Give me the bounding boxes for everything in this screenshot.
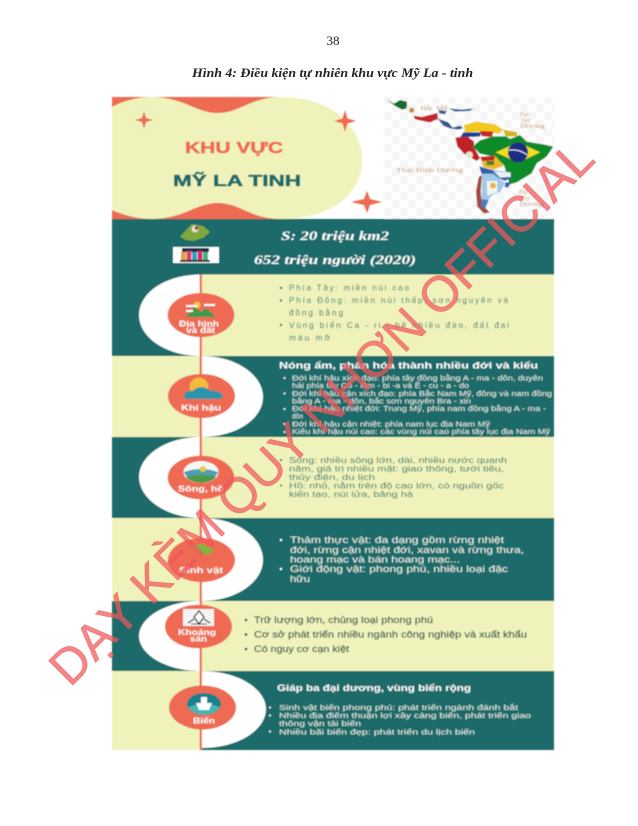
map of Latin America: Đại bbox=[519, 190, 528, 196]
header blob panel: MỸ LA TINH bbox=[173, 172, 301, 190]
panel: terrain and soil: Vùng biển Ca - ri - bê nhiều đảo, đất đai bbox=[289, 320, 509, 330]
map of Latin America: Thái Bình Dương bbox=[396, 168, 463, 174]
panel: living things: Thảm thực vật: đa dạng gồm rừng nhiệt bbox=[290, 535, 505, 545]
center timeline line bbox=[200, 274, 202, 750]
panel: sea: Sinh vật biển phong phú: phát triển ngành đánh bắt bbox=[279, 703, 519, 712]
panel: rivers and lakes bbox=[112, 437, 554, 518]
badge: terrain: và đất bbox=[186, 326, 216, 335]
panel: climate: Kiểu khí hậu núi cao: các vùng núi cao phía tây lục địa Nam Mỹ bbox=[292, 427, 551, 436]
panel: living things: hoang mạc và bán hoang mạc... bbox=[290, 554, 460, 564]
panel: minerals bbox=[112, 601, 554, 671]
badge: rivers: Sông, hồ bbox=[178, 484, 224, 494]
panel: terrain and soil bbox=[112, 274, 554, 356]
badge: climate: Khí hậu bbox=[181, 404, 221, 412]
panel: climate: bằng A - ma - dôn, bắc sơn nguyên Bra - xin bbox=[292, 396, 471, 406]
icon: area map bbox=[180, 224, 210, 241]
panel: living things: đới, rừng cận nhiệt đới, xavan và rừng thưa, bbox=[290, 545, 524, 555]
badge: living things: Sinh vật bbox=[179, 566, 224, 575]
stats band bbox=[112, 219, 554, 274]
panel: minerals: Trữ lượng lớn, chủng loại phong phú bbox=[254, 615, 433, 625]
badge: rivers bbox=[168, 456, 234, 499]
badge: minerals: sản bbox=[190, 634, 207, 644]
panel: terrain and soil: màu mỡ bbox=[289, 334, 331, 342]
icon: population bbox=[173, 247, 219, 263]
stats band: S: 20 triệu km2 bbox=[281, 228, 390, 243]
panel: climate: Đới khí hậu cận nhiệt: phía nam lục địa Nam Mỹ bbox=[292, 420, 491, 428]
panel: sea: Giáp ba đại dương, vùng biển rộng bbox=[277, 683, 471, 693]
panel: rivers and lakes: kiến tạo, núi lửa, băng hà bbox=[289, 489, 413, 499]
badge: minerals bbox=[165, 605, 232, 648]
panel: climate: Nóng ẩm, phân hóa thành nhiều đới và kiểu bbox=[279, 360, 538, 372]
badge: terrain bbox=[168, 293, 234, 337]
panel: sea bbox=[112, 671, 554, 750]
badge: terrain: Địa hình bbox=[179, 320, 219, 328]
panel: rivers and lakes: Hồ: nhỏ, nằm trên độ cao lớn, có nguồn gốc bbox=[289, 480, 505, 490]
panel: terrain and soil: Phía Tây: miền núi cao bbox=[289, 284, 409, 292]
panel: climate bbox=[112, 356, 554, 437]
panel: sea: Nhiều địa điểm thuận lợi xây cảng biển, phát triển giao bbox=[279, 711, 531, 720]
watermark: DẠY KÈM QUY NHƠN OFFICIAL bbox=[38, 129, 605, 696]
panel: sea: thông vận tải biển bbox=[279, 719, 361, 728]
panel: climate: Đới khí hậu xích đạo: phía tây đồng bằng A - ma - dôn, duyên bbox=[292, 374, 543, 382]
panel: terrain and soil: đồng bằng bbox=[289, 308, 343, 318]
page number: 38 bbox=[326, 33, 340, 48]
badge: sea: Biển bbox=[193, 716, 215, 726]
stats band: 652 triệu người (2020) bbox=[254, 252, 416, 267]
panel: minerals: Cơ sở phát triển nhiều ngành công nghiệp và xuất khẩu bbox=[254, 630, 527, 640]
panel: climate: Đới khí hậu cận xích đạo: phía Bắc Nam Mỹ, đông và nam đồng bbox=[292, 389, 552, 398]
badge: minerals: Khoáng bbox=[178, 628, 216, 637]
map of Latin America bbox=[384, 97, 554, 219]
map of Latin America: Bắc Mỹ bbox=[420, 105, 448, 112]
panel: living things: hữu bbox=[290, 574, 310, 584]
badge: living things bbox=[168, 538, 235, 582]
panel: sea: Nhiều bãi biển đẹp: phát triển du lịch biển bbox=[279, 728, 475, 736]
panel: climate: dôn bbox=[292, 412, 303, 420]
map of Latin America: Dương bbox=[519, 202, 544, 208]
header blob panel bbox=[112, 97, 382, 219]
panel: climate: hải phía tây Cô - lôm - bi -a và Ê - cu - a - do bbox=[292, 381, 469, 390]
map of Latin America: Dương bbox=[520, 124, 545, 130]
badge: sea bbox=[169, 686, 236, 730]
panel: living things: Giới động vật: phong phú, nhiều loại đặc bbox=[290, 564, 509, 574]
infographic bbox=[112, 97, 554, 750]
map of Latin America: Tây bbox=[520, 196, 529, 202]
figure caption: Hình 4: Điều kiện tự nhiên khu vực Mỹ La - tinh bbox=[191, 66, 473, 80]
header blob panel: KHU VỰC bbox=[185, 140, 283, 157]
panel: rivers and lakes: thủy điện, du lịch bbox=[289, 472, 375, 482]
map of Latin America: Đại bbox=[520, 112, 529, 118]
panel: minerals: Có nguy cơ cạn kiệt bbox=[254, 644, 350, 654]
badge: climate bbox=[168, 374, 235, 418]
map of Latin America: Tây bbox=[521, 118, 530, 124]
panel: rivers and lakes: năm, giá trị nhiều mặt: giao thông, tưới tiêu, bbox=[289, 464, 504, 474]
panel: climate: Đới khí hậu nhiệt đới: Trung Mỹ, phía nam đồng bằng A - ma - bbox=[292, 404, 547, 413]
panel: living things bbox=[112, 518, 554, 601]
panel: terrain and soil: Phía Đông: miền núi thấp, sơn nguyên và bbox=[289, 296, 508, 305]
panel: rivers and lakes: Sông: nhiều sông lớn, dài, nhiều nước quanh bbox=[289, 455, 507, 465]
